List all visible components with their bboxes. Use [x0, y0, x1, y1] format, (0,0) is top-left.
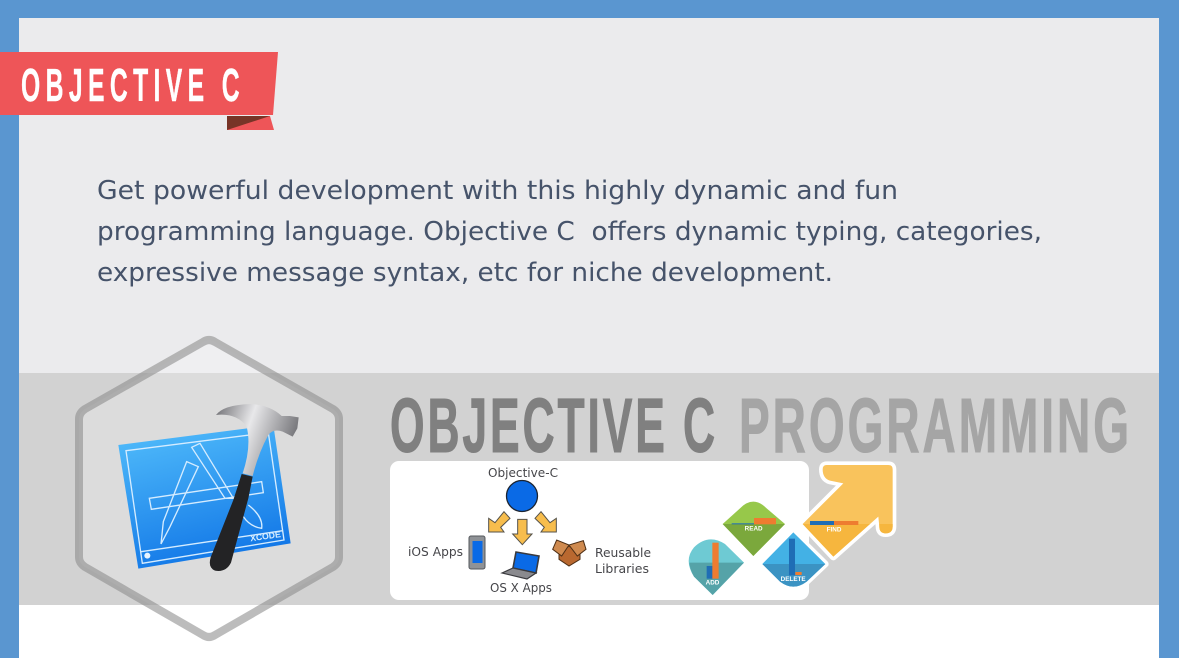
icon: phone	[469, 536, 485, 569]
diamond: read: READ	[745, 526, 763, 533]
diamond: read	[723, 502, 785, 556]
diamond: delete	[762, 532, 825, 587]
label: objective-c: Objective-C	[488, 465, 558, 480]
diagram: objective-c outputs	[408, 465, 651, 595]
description text: expressive message syntax, etc for niche development.	[97, 258, 833, 288]
icon: laptop	[502, 552, 539, 579]
label: os x apps: OS X Apps	[490, 580, 552, 595]
icon: blueprint: XCODE	[250, 529, 282, 543]
white diagram card	[390, 461, 809, 600]
title: objective c programming: OBJECTIVE C	[390, 383, 718, 469]
diamond: add	[689, 539, 744, 595]
label: reusable libraries: Reusable	[595, 545, 651, 560]
arrow: find	[803, 465, 893, 557]
arrows: yellow	[489, 512, 556, 545]
label: libraries: Libraries	[595, 561, 649, 576]
diamond: add: ADD	[706, 579, 720, 586]
ribbon heading	[0, 52, 278, 130]
icon: box	[553, 540, 586, 566]
hexagon badge	[79, 340, 339, 637]
description text	[97, 176, 1042, 288]
icon: xcode blueprint and hammer	[118, 404, 299, 571]
diagram: crud diamonds and arrow	[689, 465, 893, 595]
label: ios apps: iOS Apps	[408, 544, 463, 559]
description text: Get powerful development with this highly dynamic and fun	[97, 176, 898, 206]
arrow: find: FIND	[827, 526, 842, 533]
icon: hammer	[210, 404, 299, 571]
icon: blueprint	[118, 425, 291, 569]
node: objective-c circle	[506, 480, 538, 512]
ribbon heading: OBJECTIVE C	[21, 59, 245, 111]
diamond: delete: DELETE	[781, 576, 806, 583]
description text: programming language. Objective C offers dynamic typing, categories,	[97, 217, 1042, 247]
